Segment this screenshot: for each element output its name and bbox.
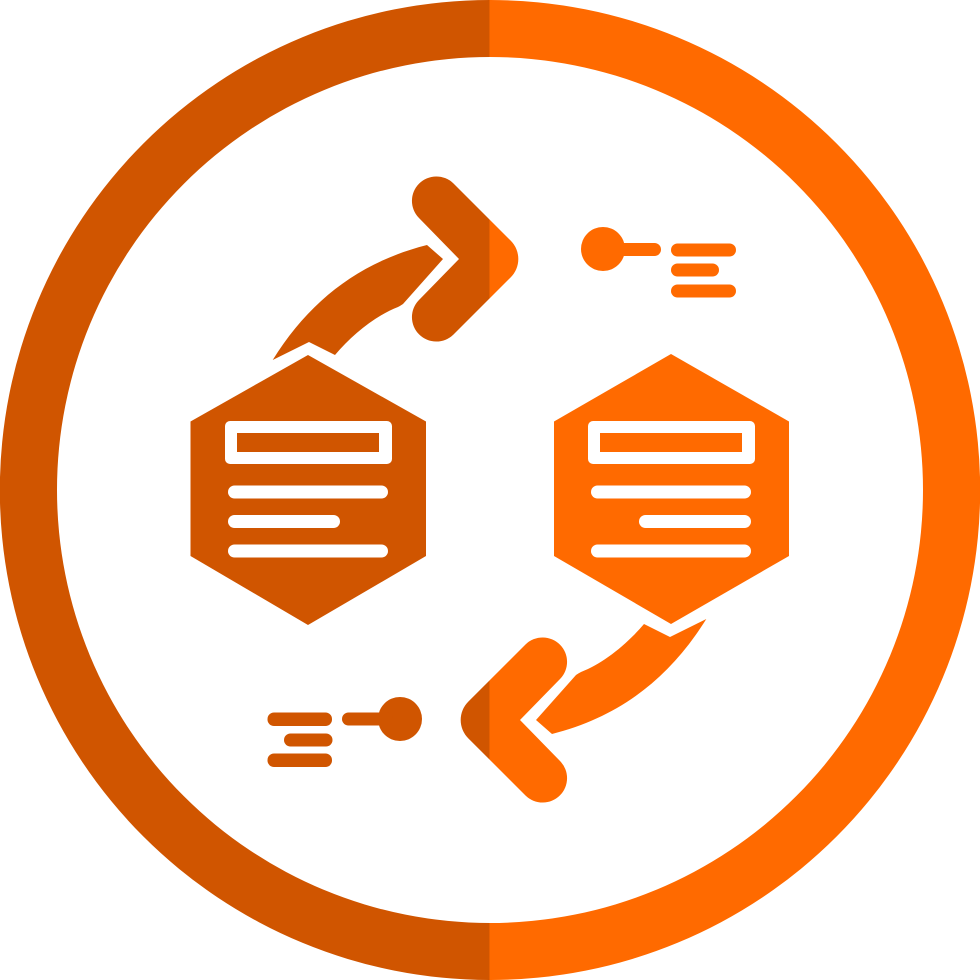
arrow head: bottom chevron (461, 637, 567, 803)
icon: top right pin and text lines (581, 227, 736, 298)
right document header box (588, 421, 755, 464)
icon: bottom curved arrow (461, 619, 706, 803)
panel: left hexagon document (190, 355, 426, 625)
left document text lines (228, 486, 388, 558)
right hexagon (554, 354, 789, 624)
panel: right hexagon document (554, 354, 789, 624)
left hexagon (190, 355, 426, 625)
arrow shaft: top (273, 245, 443, 360)
icon: top curved arrow (273, 176, 518, 360)
icon: bottom left pin and text lines (268, 697, 422, 767)
arrow head: top chevron (412, 176, 518, 342)
right document text lines (591, 486, 751, 558)
arrow shaft: bottom (536, 619, 706, 734)
left document header box (225, 421, 392, 464)
